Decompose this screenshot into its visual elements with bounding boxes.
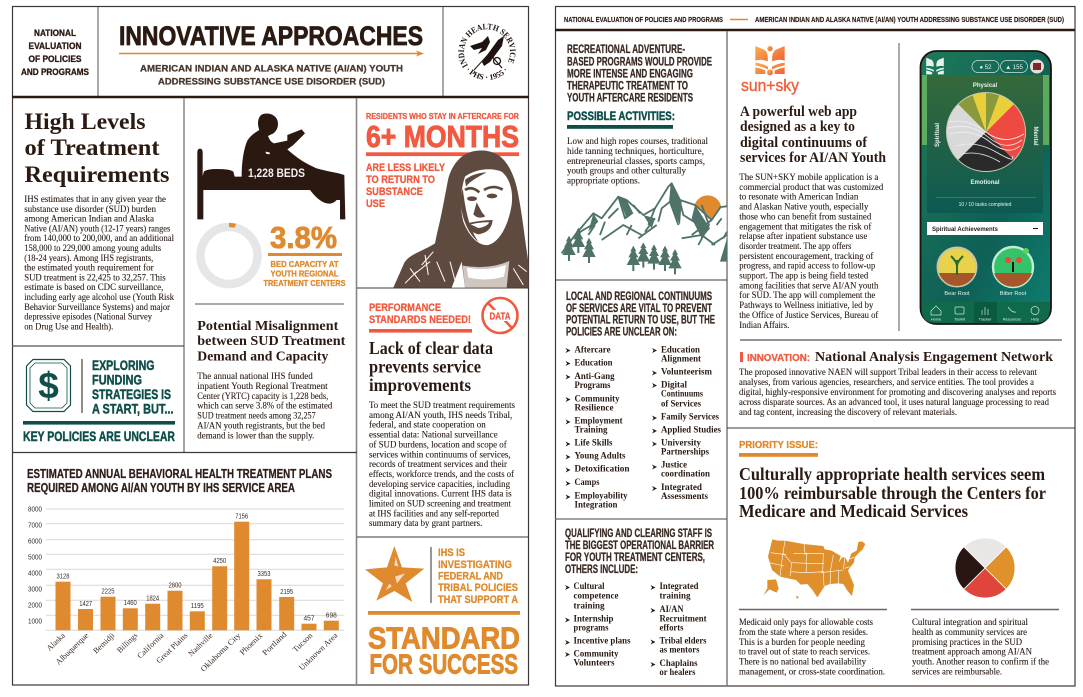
panel: bar chart treatment plans: 4000 — [28, 570, 42, 578]
header: page two running head: NATIONAL EVALUATION OF POLICIES AND PROGRAMS — [564, 17, 723, 24]
text block: exploring funding — [92, 357, 174, 416]
heading: chart title: REQUIRED AMONG AI/AN YOUTH BY IHS SERVICE AREA — [27, 480, 295, 495]
panel: bar chart treatment plans — [27, 466, 344, 674]
text block: app body: commercial product that was customized — [739, 182, 884, 192]
list: continuums column two — [652, 344, 721, 501]
subtitle: ADDRESSING SUBSTANCE USE DISORDER (SUD) — [158, 76, 385, 88]
icon: phone app mockup: 10 / 10 tasks completed — [959, 202, 1012, 208]
text block: high levels body: among American Indian and Alaska — [24, 214, 154, 224]
list: barriers column one: Internship — [574, 614, 614, 624]
text block: performance body: services within continuums of services, — [369, 449, 511, 459]
text block: naen body: and tag content, increasing the discovery of relevant materials. — [739, 407, 957, 417]
header label: national evaluation: AND PROGRAMS — [21, 67, 89, 77]
icon: phone app mockup: Spiritual Achievements — [932, 226, 999, 233]
icon: no data: DATA — [490, 312, 510, 322]
icon: no data — [482, 298, 518, 333]
list: barriers column two — [650, 581, 707, 677]
panel: bar chart treatment plans: 2195 — [280, 589, 293, 596]
panel: bar chart treatment plans: California — [135, 631, 166, 660]
list: continuums column two: Digital — [661, 379, 687, 389]
text block: cultural integration: services are reimbursable. — [912, 666, 1002, 676]
panel: qualifying staff — [565, 526, 714, 677]
panel: bar chart treatment plans: 3353 — [258, 571, 271, 578]
panel: bar chart treatment plans: 5000 — [28, 554, 42, 562]
icon: phone app mockup: Resources — [1003, 318, 1021, 322]
list: barriers column one: competence — [574, 591, 618, 601]
list: continuums column two: Applied Studies — [661, 424, 721, 434]
text block: misalignment body — [197, 371, 333, 440]
list: continuums column two: Assessments — [661, 491, 708, 501]
list: barriers column two: Tribal elders — [660, 636, 707, 646]
panel: bar chart treatment plans: 7000 — [28, 522, 42, 530]
icon: phone app mockup: Emotional — [970, 180, 1000, 186]
panel: standard for success: THAT SUPPORT A — [438, 594, 518, 606]
text block: key policies: KEY POLICIES ARE UNCLEAR — [23, 429, 175, 444]
list: continuums column one: Detoxification — [574, 464, 630, 474]
panel: qualifying staff: THE BIGGEST OPERATIONAL BARRIER — [565, 538, 714, 552]
text block: exploring funding: A START, BUT... — [92, 400, 174, 416]
panel: bar chart treatment plans: 457 — [304, 616, 315, 622]
text block: performance body: at IHS facilities and any self-reported — [369, 508, 499, 518]
text block: app body: those who can benefit from sustained — [739, 211, 872, 221]
list: barriers column two: Integrated — [660, 581, 698, 591]
text block: high levels body: substance use disorder (SUD) burden — [24, 204, 156, 214]
heading: culturally appropriate: Medicare and Medicaid Services — [739, 501, 968, 521]
text block: misalignment body: SUD treatment needs among 32,257 — [197, 411, 316, 421]
icon: star — [365, 546, 424, 602]
list: barriers column two: efforts — [660, 622, 684, 632]
list: barriers column one — [565, 581, 631, 668]
text block: high levels body: Behavior Surveillance Systems) and major — [24, 302, 170, 312]
panel: bar chart treatment plans: 4250 — [213, 558, 226, 565]
panel: continuums of services: LOCAL AND REGIONAL CONTINUUMS — [566, 289, 712, 303]
header label: national evaluation: OF POLICIES — [28, 54, 82, 64]
heading: high levels: Requirements — [24, 162, 170, 188]
text block: performance body: digital innovations. Current IHS data is — [369, 489, 512, 499]
panel: performance standards: STANDARDS NEEDED! — [369, 314, 471, 326]
text block: high levels body: IHS estimates that in any given year the — [24, 194, 166, 204]
panel: standard for success: INVESTIGATING — [438, 559, 512, 571]
list: barriers column one: Volunteers — [574, 658, 615, 668]
heading: lack of clear data: prevents service — [369, 356, 481, 376]
list: barriers column one: Cultural — [574, 581, 605, 591]
text block: misalignment body: inpatient Youth Regional Treatment — [197, 381, 328, 391]
heading: chart title: ESTIMATED ANNUAL BEHAVIORAL HEALTH TREATMENT PLANS — [27, 466, 332, 481]
text block: naen body: analyses, from various agencies, researchers, and service entities. The tool provides a — [739, 377, 1034, 387]
panel: six months callout: ARE LESS LIKELY — [366, 162, 446, 174]
panel: performance standards: PERFORMANCE — [369, 302, 441, 314]
text block: performance body: developing service capacities, including — [369, 479, 510, 489]
text block: cultural integration: health as community services are — [912, 627, 1027, 637]
list: barriers column two: Chaplains — [660, 658, 698, 668]
text block: high levels body: estimate is based on CDC surveillance, — [24, 282, 163, 292]
icon: phone app mockup: Spiritual — [935, 123, 941, 147]
text block: naen body: The proposed innovative NAEN will support Tribal leaders in their access to relevant — [739, 367, 1037, 377]
list: continuums column two: coordination — [661, 468, 710, 478]
panel: bar chart treatment plans: 1824 — [146, 596, 159, 602]
icon: phone app mockup: Help — [1031, 318, 1039, 322]
text block: cultural integration: treatment approach among AI/AN — [912, 647, 1032, 657]
icon: indian health service seal: · PHS · 1955 · — [468, 68, 506, 80]
heading: lack of clear data: improvements — [369, 375, 471, 395]
text block: medicaid: management, or cross-state coordination. — [739, 666, 885, 676]
heading: high levels — [24, 109, 170, 188]
text block: high levels body: including early age alcohol use (Youth Risk — [24, 292, 174, 302]
logo text: sun+sky — [741, 76, 799, 95]
icon: phone app mockup: ▲ 155 — [1005, 65, 1023, 71]
text block: cultural integration: promising practices in the SUD — [912, 637, 1022, 647]
text block: cultural integration: Cultural integration and spiritual — [912, 617, 1028, 627]
text block: app body: the Office of Justice Services, Bureau of — [739, 310, 878, 320]
icon: phone app mockup: Physical — [973, 83, 998, 89]
text block: misalignment body: AI/AN youth registrants, but the bed — [197, 420, 325, 430]
heading: chart title — [27, 466, 332, 495]
text block: high levels body: 158,000 to 229,000 among young adults — [24, 243, 161, 253]
heading: naen: National Analysis Engagement Network — [815, 349, 1053, 364]
heading: culturally appropriate: Culturally appropriate health services seem — [739, 464, 1045, 484]
list: continuums column two: Volunteerism — [661, 366, 712, 376]
list: barriers column two: AI/AN — [660, 604, 684, 614]
panel: six months callout: SUBSTANCE — [366, 186, 423, 198]
text block: cultural integration — [912, 617, 1049, 676]
panel: bar chart treatment plans: Unknown Area — [297, 631, 340, 672]
panel: bar chart treatment plans: Billings — [115, 631, 139, 655]
panel: bar chart treatment plans: Bemidji — [91, 630, 117, 655]
panel: qualifying staff: QUALIFYING AND CLEARING STAFF IS — [565, 526, 712, 540]
text block: exploring funding: STRATEGIES IS — [92, 386, 171, 402]
panel: continuums of services: POLICIES ARE UNCLEAR ON: — [566, 324, 677, 338]
heading: powerful web app: digital continuums of — [740, 135, 868, 151]
text block: app body: The SUN+SKY mobile application is a — [739, 172, 878, 182]
list: continuums column one: Anti-Gang — [574, 371, 615, 381]
text block: performance body: federal, and state cooperation on — [369, 420, 486, 430]
list: continuums column two: Education — [661, 344, 700, 354]
list: continuums column one: Employment — [574, 416, 623, 426]
heading: potential misalignment: Potential Misalignment — [197, 319, 339, 334]
panel: recreational adventure: BASED PROGRAMS WOULD PROVIDE — [567, 54, 712, 68]
panel: national analysis engagement network — [739, 349, 1056, 417]
list: continuums column one: Life Skills — [574, 438, 613, 448]
panel: recreational adventure — [562, 42, 727, 274]
panel: qualifying staff: OTHERS INCLUDE: — [565, 562, 638, 576]
header: page two running head — [564, 17, 1064, 24]
list: continuums column one: Aftercare — [574, 344, 610, 354]
text block: high levels body: depressive episodes (National Survey — [24, 312, 152, 322]
list: continuums column two: Alignment — [661, 354, 701, 364]
icon: mountains, trees and sun — [562, 183, 727, 274]
list: continuums column two: Partnerships — [661, 446, 709, 456]
panel: bar chart treatment plans: 8000 — [28, 506, 42, 514]
panel: six months callout: TO RETURN TO — [366, 174, 435, 186]
panel: page one frame — [12, 6, 528, 685]
text block: high levels body: Native (AI/AN) youth (12-17 years) ranges — [24, 223, 171, 233]
panel: recreational adventure: MORE INTENSE AND ENGAGING — [567, 66, 693, 80]
list: barriers column one: Community — [574, 648, 619, 658]
text block: activities: hide tanning techniques, horticulture, — [567, 146, 704, 156]
icon: person reading on bed — [197, 114, 345, 219]
heading: potential misalignment: Demand and Capacity — [197, 350, 328, 364]
title: INNOVATIVE APPROACHES — [119, 21, 423, 51]
heading: culturally appropriate: 100% reimbursable through the Centers for — [739, 483, 1046, 503]
panel: recreational adventure: YOUTH AFTERCARE RESIDENTS — [567, 90, 693, 104]
text block: app body: progress, and rapid access to follow-up — [739, 261, 876, 271]
header label: national evaluation: EVALUATION — [28, 41, 82, 51]
heading: high levels: of Treatment — [24, 135, 160, 161]
text block: exploring funding: FUNDING — [92, 372, 142, 388]
panel: bar chart treatment plans: Albuquerque — [54, 631, 91, 667]
text block: performance body: records of treatment services and their — [369, 459, 507, 469]
text block: naen body: across disparate sources. As an advanced tool, it uses natural language processing to read — [739, 397, 1049, 407]
panel: bar chart treatment plans: Oklahoma City — [199, 631, 242, 674]
text block: app body: engagement that mitigates the risk of — [739, 221, 871, 231]
text block: high levels body: from 140,000 to 200,000, and an additional — [24, 233, 174, 243]
panel: qualifying staff: FOR YOUTH TREATMENT CENTERS, — [565, 550, 705, 564]
list: continuums column one: Training — [574, 424, 608, 434]
text block: performance body: of SUD burdens, location and scope of — [369, 439, 507, 449]
list: continuums column one: Camps — [574, 477, 600, 487]
text block: medicaid: This is a burden for people needing — [739, 637, 865, 647]
panel: bar chart treatment plans: 1195 — [191, 603, 204, 610]
heading: powerful web app: designed as a key to — [740, 119, 855, 135]
text block: cultural integration: youth. Another reason to confirm if the — [912, 657, 1049, 667]
list: barriers column two: Recruitment — [660, 614, 706, 624]
panel: priority issue: PRIORITY ISSUE: — [739, 439, 818, 451]
panel: bar chart treatment plans: 1460 — [124, 600, 137, 607]
list: continuums column one: Programs — [574, 380, 611, 390]
icon: phone app mockup: Toolkit — [954, 318, 966, 322]
list: barriers column one: training — [574, 600, 605, 610]
list: continuums column one: Resilience — [574, 402, 614, 412]
text block: medicaid: There is no national bed availability — [739, 657, 866, 667]
panel: standard for success: FOR SUCCESS — [370, 648, 518, 680]
panel: bar chart treatment plans: 2800 — [168, 582, 182, 590]
heading: potential misalignment: between SUD Treatment — [197, 334, 346, 349]
panel: bar chart treatment plans: 7156 — [235, 514, 248, 520]
panel: six months callout: USE — [366, 198, 385, 210]
icon: person reading on bed: 1,228 BEDS — [248, 168, 305, 180]
list: barriers column one: programs — [574, 623, 609, 633]
list: continuums column two: Continuums — [661, 388, 703, 398]
panel: bar chart treatment plans: Portland — [261, 630, 288, 657]
icon: phone app mockup — [920, 51, 1051, 324]
panel: bar chart treatment plans: 2000 — [28, 602, 42, 610]
text block: naen body: digital, highly-responsive environment for promoting and discovering analyses and reports — [739, 387, 1056, 397]
panel: standard for success: TRIBAL POLICIES — [438, 582, 518, 594]
panel: continuums of services: OF SERVICES ARE VITAL TO PREVENT — [566, 301, 713, 315]
icon: phone app mockup: Mental — [1032, 126, 1038, 146]
panel: bar chart treatment plans: Tucson — [291, 631, 314, 654]
panel: bar chart treatment plans: Great Plains — [154, 631, 189, 665]
heading: powerful web app — [740, 104, 887, 166]
text block: performance body: among AI/AN youth, IHS needs Tribal, — [369, 410, 512, 420]
list: barriers column two: training — [660, 590, 691, 600]
text block: app body: relapse after inpatient substance use — [739, 231, 867, 241]
heading: possible activities: POSSIBLE ACTIVITIES: — [567, 109, 675, 123]
text block: activities: appropriate options. — [567, 176, 640, 186]
text block: app body: among facilities that serve AI/AN youth — [739, 280, 879, 290]
header label: national evaluation: NATIONAL — [34, 28, 76, 38]
list: continuums column one: Community — [574, 394, 620, 404]
text block: app body — [739, 172, 884, 330]
list: continuums column two: of Services — [661, 398, 701, 408]
list: continuums column one: Education — [574, 358, 612, 368]
panel: bar chart treatment plans: 3000 — [28, 586, 42, 594]
text block: app body: Indian Affairs. — [739, 320, 789, 330]
subtitle: AMERICAN INDIAN AND ALASKA NATIVE (AI/AN) YOUTH — [140, 64, 403, 74]
text block: activities: Low and high ropes courses, traditional — [567, 136, 708, 146]
icon: dollar bill — [26, 360, 70, 412]
panel: bar chart treatment plans: 3128 — [56, 574, 70, 580]
text block: medicaid: to travel out of state to reach services. — [739, 647, 870, 657]
panel: continuums of services — [566, 289, 721, 510]
text block: medicaid: Medicaid only pays for allowable costs — [739, 617, 873, 627]
text block: high levels body — [24, 194, 174, 331]
heading: powerful web app: services for AI/AN Youth — [740, 150, 887, 166]
icon: bitter root badge — [993, 247, 1033, 287]
panel: six months callout: 6+ MONTHS — [366, 120, 519, 154]
list: continuums column one: Employability — [574, 490, 628, 500]
text block: app body: support. The app is being field tested — [739, 270, 869, 280]
panel: national analysis engagement network: INNOVATION: — [747, 352, 810, 364]
text block: exploring funding: EXPLORING — [92, 357, 155, 373]
panel: six months callout: RESIDENTS WHO STAY IN AFTERCARE FOR — [366, 111, 520, 121]
icon: indian health service seal: INDIAN HEALTH SERVICE — [458, 24, 516, 68]
panel: sun+sky app — [739, 46, 887, 330]
panel: page two frame — [556, 6, 1075, 686]
list: continuums column two: Justice — [661, 460, 687, 470]
text block: app body: persistent encouragement, tracking of — [739, 251, 873, 261]
icon: phone app mockup: Home — [931, 318, 941, 322]
icon: dollar bill: $ — [38, 365, 59, 406]
panel: recreational adventure: RECREATIONAL ADVENTURE- — [567, 42, 685, 56]
panel: bar chart treatment plans: 698 — [326, 612, 337, 620]
list: barriers column one: Incentive plans — [574, 636, 631, 646]
icon: medicine wheel — [955, 538, 1015, 598]
heading: lack of clear data — [369, 338, 493, 395]
list: barriers column two: or healers — [660, 667, 696, 677]
heading: culturally appropriate — [739, 464, 1046, 521]
text block: misalignment body: demand is lower than the supply. — [197, 430, 314, 440]
text block: activities — [567, 136, 708, 186]
panel: standard for success: IHS IS — [438, 547, 465, 559]
text block: app body: for SUD. The app will complement the — [739, 290, 875, 300]
text block: app body: disorder treatment. The app offers — [739, 241, 852, 251]
panel: bar chart treatment plans: Alaska — [45, 631, 67, 653]
list: continuums column one: Young Adults — [574, 450, 626, 460]
panel: standard for success: FEDERAL AND — [438, 570, 503, 582]
text block: performance body: essential data: National surveillance — [369, 430, 498, 440]
text block: misalignment body: Center (YRTC) capacity is 1,228 beds, — [197, 391, 328, 401]
list: continuums column two: University — [661, 438, 701, 448]
header label: national evaluation — [21, 28, 89, 77]
text block: app body: Pathways to Wellness initiative, led by — [739, 300, 874, 310]
panel: bar chart treatment plans: 1000 — [28, 618, 42, 626]
panel: bar chart treatment plans: 1427 — [79, 601, 92, 608]
list: continuums column one: Integration — [574, 500, 618, 510]
heading: potential misalignment — [197, 319, 346, 364]
text block: performance body — [369, 400, 515, 528]
panel: performance standards — [369, 298, 518, 528]
text block: activities: entrepreneurial classes, sports camps, — [567, 156, 705, 166]
icon: bear root badge — [938, 248, 976, 286]
list: barriers column two: as mentors — [660, 644, 700, 654]
icon: phone app mockup: Bear Root — [944, 291, 970, 297]
text block: misalignment body: which can serve 3.8% of the estimated — [197, 401, 333, 411]
stat: 3.8 percent: YOUTH REGIONAL — [270, 270, 338, 278]
text block: naen body — [739, 367, 1056, 417]
panel: standard for success — [365, 546, 520, 680]
heading: lack of clear data: Lack of clear data — [369, 338, 493, 358]
text block: performance body: effects, workforce trends, and the costs of — [369, 469, 514, 479]
list: continuums column two: Integrated — [661, 482, 702, 492]
text block: misalignment body: The annual national IHS funded — [197, 371, 313, 381]
text block: medicaid: from the state where a person resides. — [739, 627, 868, 637]
panel: bar chart treatment plans: Phoenix — [238, 631, 264, 657]
panel: recreational adventure: THERAPEUTIC TREATMENT TO — [567, 78, 688, 92]
panel: six months callout — [366, 111, 528, 288]
arrow: title underline — [119, 50, 424, 56]
stat: 3.8 percent: TREATMENT CENTERS — [264, 279, 346, 288]
text block: high levels body: on Drug Use and Health). — [24, 321, 113, 331]
text block: activities: youth groups and other culturally — [567, 166, 686, 176]
text block: performance body: limited on SUD screening and treatment — [369, 498, 511, 508]
text block: high levels body: the estimated youth requirement for — [24, 263, 154, 273]
panel: continuums of services: POTENTIAL RETURN TO USE, BUT THE — [566, 312, 715, 326]
panel: standard for success: STANDARD — [368, 620, 520, 656]
icon: phone app mockup: Tracker — [979, 318, 992, 322]
stat: 3.8 percent: BED CAPACITY AT — [270, 260, 338, 269]
icon: sun+sky logo — [755, 46, 785, 75]
text block: performance body: summary data by grant partners. — [369, 518, 482, 528]
heading: high levels: High Levels — [24, 109, 146, 135]
subtitle — [140, 64, 403, 88]
panel: priority issue — [739, 439, 1059, 676]
panel: bar chart treatment plans: 6000 — [28, 538, 42, 546]
text block: app body: to resonate with American Indian — [739, 192, 859, 202]
icon: us map — [763, 539, 865, 598]
text block: high levels body: (18-24 years). Among IHS registrants, — [24, 253, 153, 263]
panel: funding strategies — [23, 357, 175, 444]
chart: wellness wheel — [946, 92, 1026, 172]
text block: performance body: To meet the SUD treatment requirements — [369, 400, 515, 410]
icon: portrait of young woman — [393, 150, 528, 288]
text block: high levels body: SUD treatment is 22,425 to 32,257. This — [24, 272, 166, 282]
icon: phone app mockup: Bitter Root — [1000, 291, 1027, 297]
list: continuums column one — [566, 344, 630, 510]
stat: 3.8 percent: 3.8% — [270, 220, 337, 255]
panel: bar chart treatment plans: 2225 — [102, 588, 115, 596]
text block: medicaid — [739, 617, 885, 676]
stat: 3.8 percent — [264, 220, 346, 288]
panel: bar chart treatment plans: Nashville — [187, 631, 215, 658]
icon: phone app mockup: ● 52 — [980, 65, 992, 71]
list: continuums column two: Family Services — [661, 412, 719, 422]
chart: donut 3.8 percent — [200, 223, 258, 284]
heading: powerful web app: A powerful web app — [740, 104, 857, 120]
text block: app body: and Alaskan Native youth, especially — [739, 202, 869, 212]
